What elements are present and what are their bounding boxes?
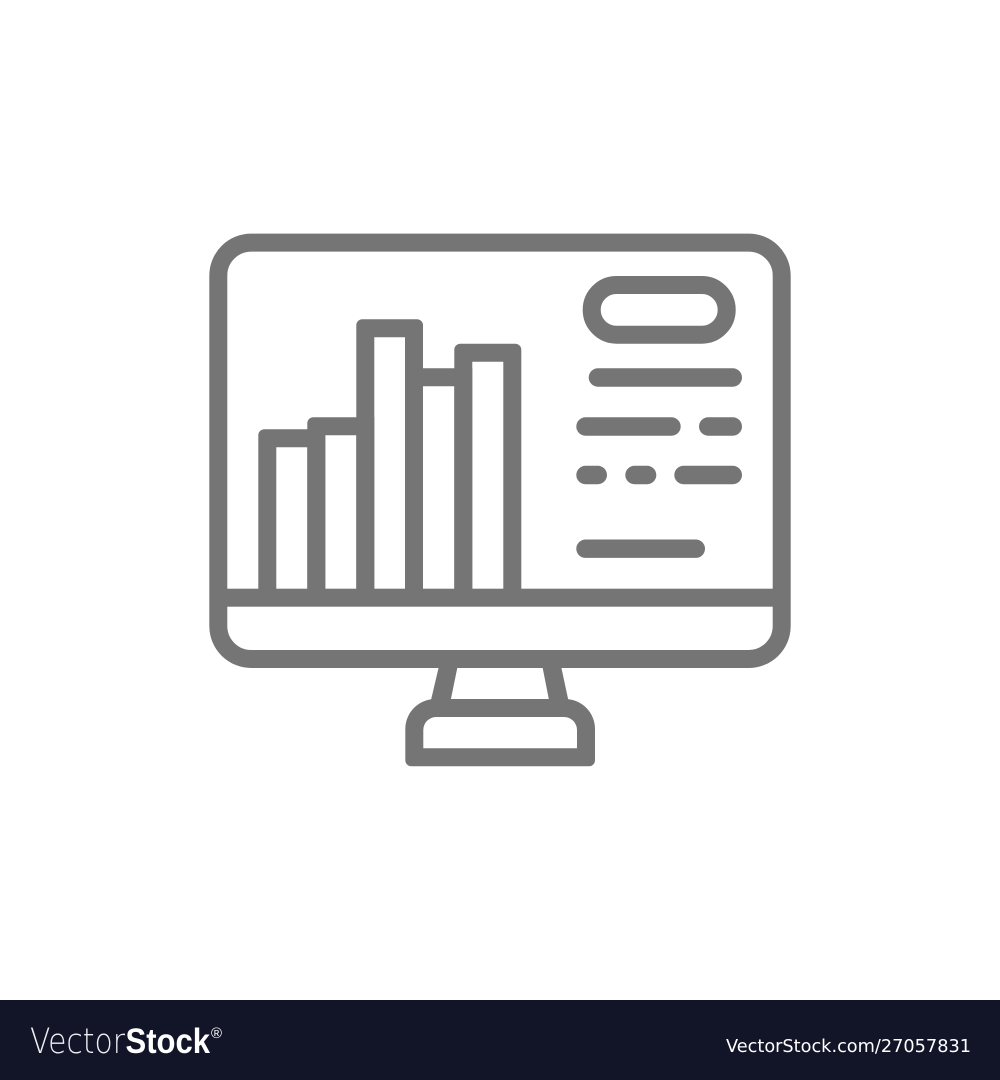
line 3 right (674, 466, 742, 484)
bar 5 (454, 344, 521, 597)
line 3 left (576, 466, 607, 484)
text placeholder lines (576, 368, 742, 558)
bar 1 (258, 429, 325, 597)
logo wordmark (30, 1022, 222, 1062)
line 1 (589, 368, 742, 387)
image id text: VectorStock.com/27057831 (726, 1036, 971, 1057)
bar 3 (356, 319, 423, 597)
logo wordmark: Stock (126, 1022, 210, 1061)
line 3 middle (625, 466, 656, 484)
icon: monitor stand neck (431, 666, 568, 700)
line 2 right (699, 417, 742, 436)
line 2 left (576, 417, 681, 436)
line 4 (576, 540, 705, 558)
logo wordmark: Vector (30, 1022, 126, 1062)
pill button (592, 285, 727, 335)
icon: monitor with bar chart (218, 243, 782, 766)
footer bar (0, 1000, 1000, 1080)
icon: monitor frame (218, 243, 782, 659)
icon: monitor stand base (405, 699, 595, 766)
screen baseline (218, 589, 782, 607)
logo wordmark: ® (211, 1026, 222, 1042)
bar chart (258, 319, 521, 597)
bar 4 (405, 368, 472, 597)
bar 2 (307, 417, 374, 597)
